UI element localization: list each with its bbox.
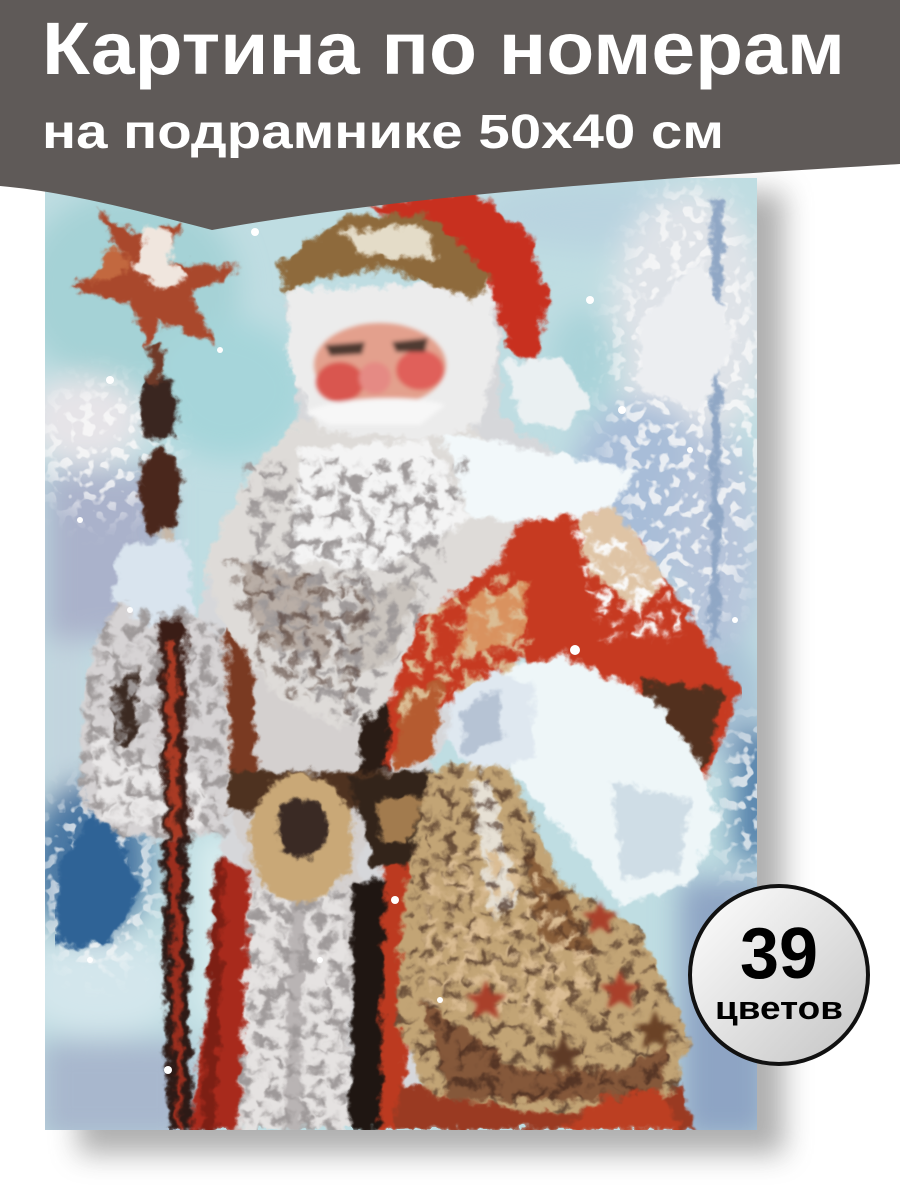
- sack: [395, 760, 695, 1130]
- subtitle: на подрамнике 50х40 см: [42, 106, 724, 159]
- header banner: [0, 0, 900, 230]
- fur robe front: [225, 620, 400, 1130]
- staff shaft: [138, 345, 192, 1130]
- textured painted figure: [55, 190, 742, 1130]
- falling snow: [77, 228, 738, 1074]
- staff with star: [70, 210, 240, 1130]
- number of colours: 39: [740, 914, 818, 994]
- sack body: [395, 760, 690, 1115]
- red and gold edges: [190, 620, 420, 1130]
- title: Картина по номерам: [42, 7, 845, 90]
- painting on stretcher: [20, 178, 780, 1140]
- colours label: цветов: [715, 990, 843, 1026]
- star on staff: [70, 210, 240, 348]
- figure base silhouette: [198, 300, 556, 1088]
- robe hem under sack: [395, 1085, 695, 1130]
- right fur cuff and mitten: [448, 655, 718, 905]
- colour count badge: [690, 886, 868, 1064]
- painting background: winter forest: [20, 178, 780, 1140]
- snow on background trees: [40, 185, 780, 970]
- robe: [190, 620, 453, 1130]
- face: [305, 323, 446, 425]
- gold hat band: [282, 215, 492, 300]
- beard: [205, 410, 640, 730]
- white fur and hair: [288, 280, 498, 440]
- belt and buckle: [228, 768, 453, 902]
- left sleeve and glove: [80, 540, 232, 840]
- canvas drop shadow: [78, 192, 784, 1154]
- right red sleeve: [385, 490, 742, 780]
- red hat: [370, 190, 548, 362]
- head: [282, 190, 590, 440]
- background tree details: [55, 200, 735, 945]
- hat pompom: [505, 358, 590, 430]
- sack stars: [465, 900, 676, 1074]
- bottom red robe: [560, 1090, 680, 1130]
